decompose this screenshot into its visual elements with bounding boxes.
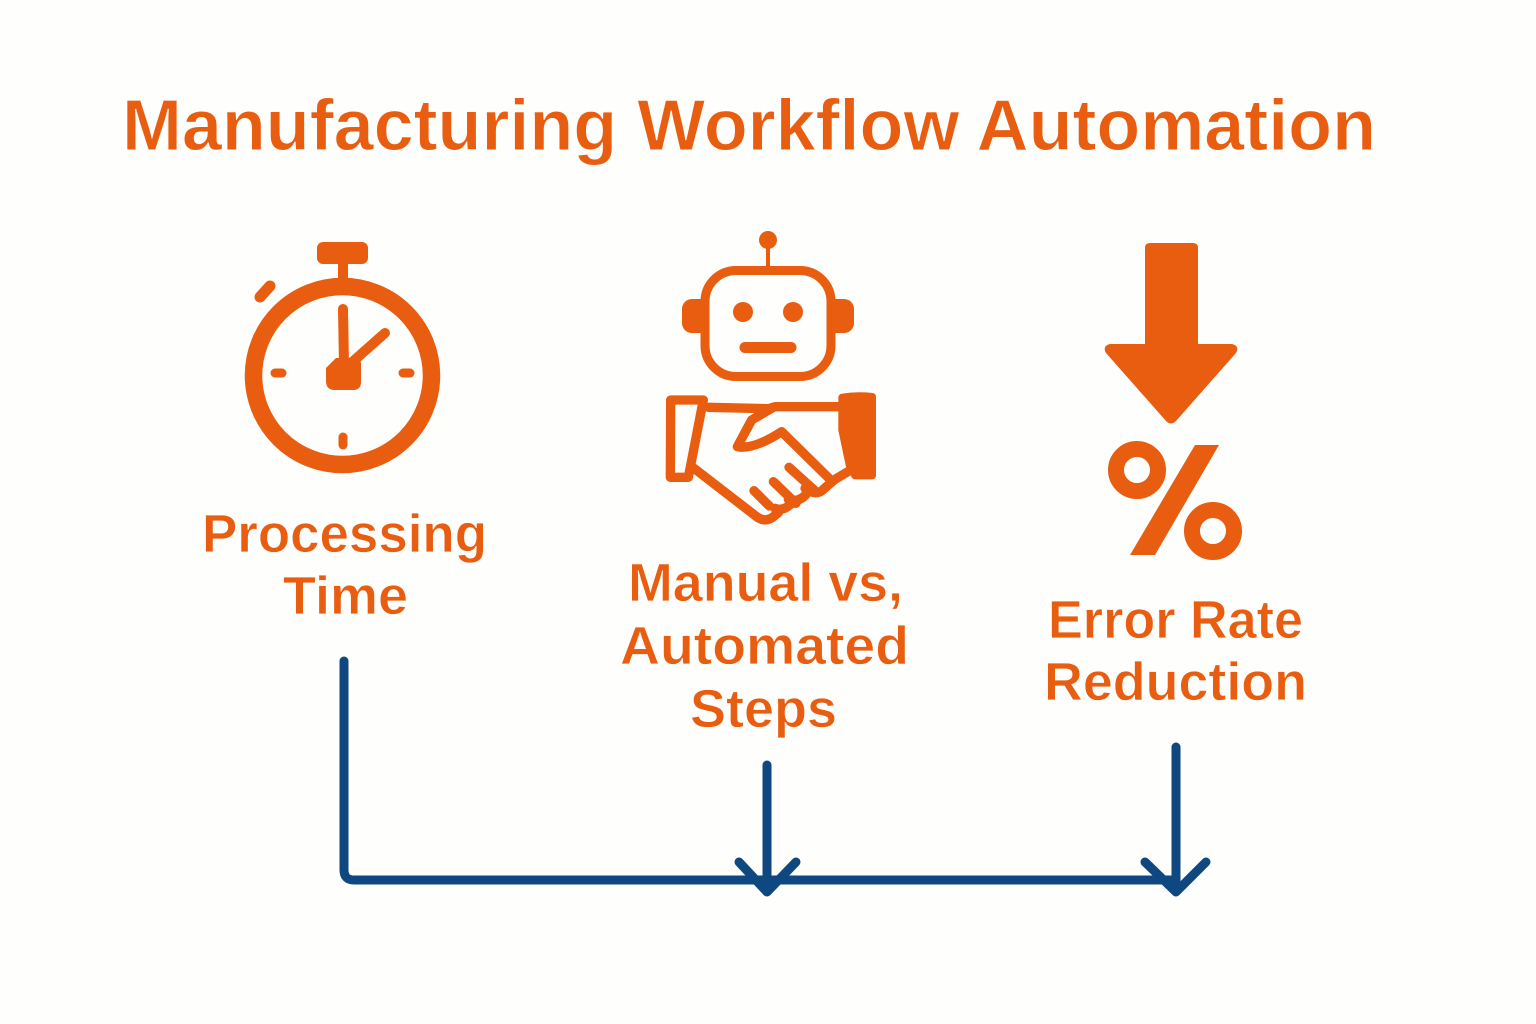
- robot head: [682, 231, 854, 376]
- icon: stopwatch: [254, 242, 432, 464]
- label: Manual vs, Automated Steps: [620, 554, 909, 739]
- handshake: [670, 396, 872, 520]
- down arrow: [1105, 243, 1237, 424]
- icon: down arrow with percent: [1105, 243, 1237, 555]
- label: Processing Time: Time: [283, 567, 408, 626]
- label: Manual vs, Automated Steps: Automated: [620, 617, 909, 676]
- connector arrows: [344, 661, 1206, 892]
- main connector line: [344, 661, 1176, 880]
- label: Error Rate Reduction: [1044, 591, 1307, 712]
- label: Manual vs, Automated Steps: Manual vs,: [628, 554, 903, 613]
- icon: robot with handshake: [670, 231, 872, 520]
- arrow: to automated steps: [739, 765, 796, 892]
- arrow: to error rate: [1145, 747, 1206, 892]
- label: Processing Time: [202, 505, 487, 626]
- label: Processing Time: Processing: [202, 505, 487, 564]
- label: Manual vs, Automated Steps: Steps: [690, 680, 837, 739]
- label: Error Rate Reduction: Error Rate: [1048, 591, 1303, 650]
- title: Manufacturing Workflow Automation: [122, 85, 1376, 166]
- label: Error Rate Reduction: Reduction: [1044, 653, 1307, 712]
- percent sign: [1116, 445, 1234, 555]
